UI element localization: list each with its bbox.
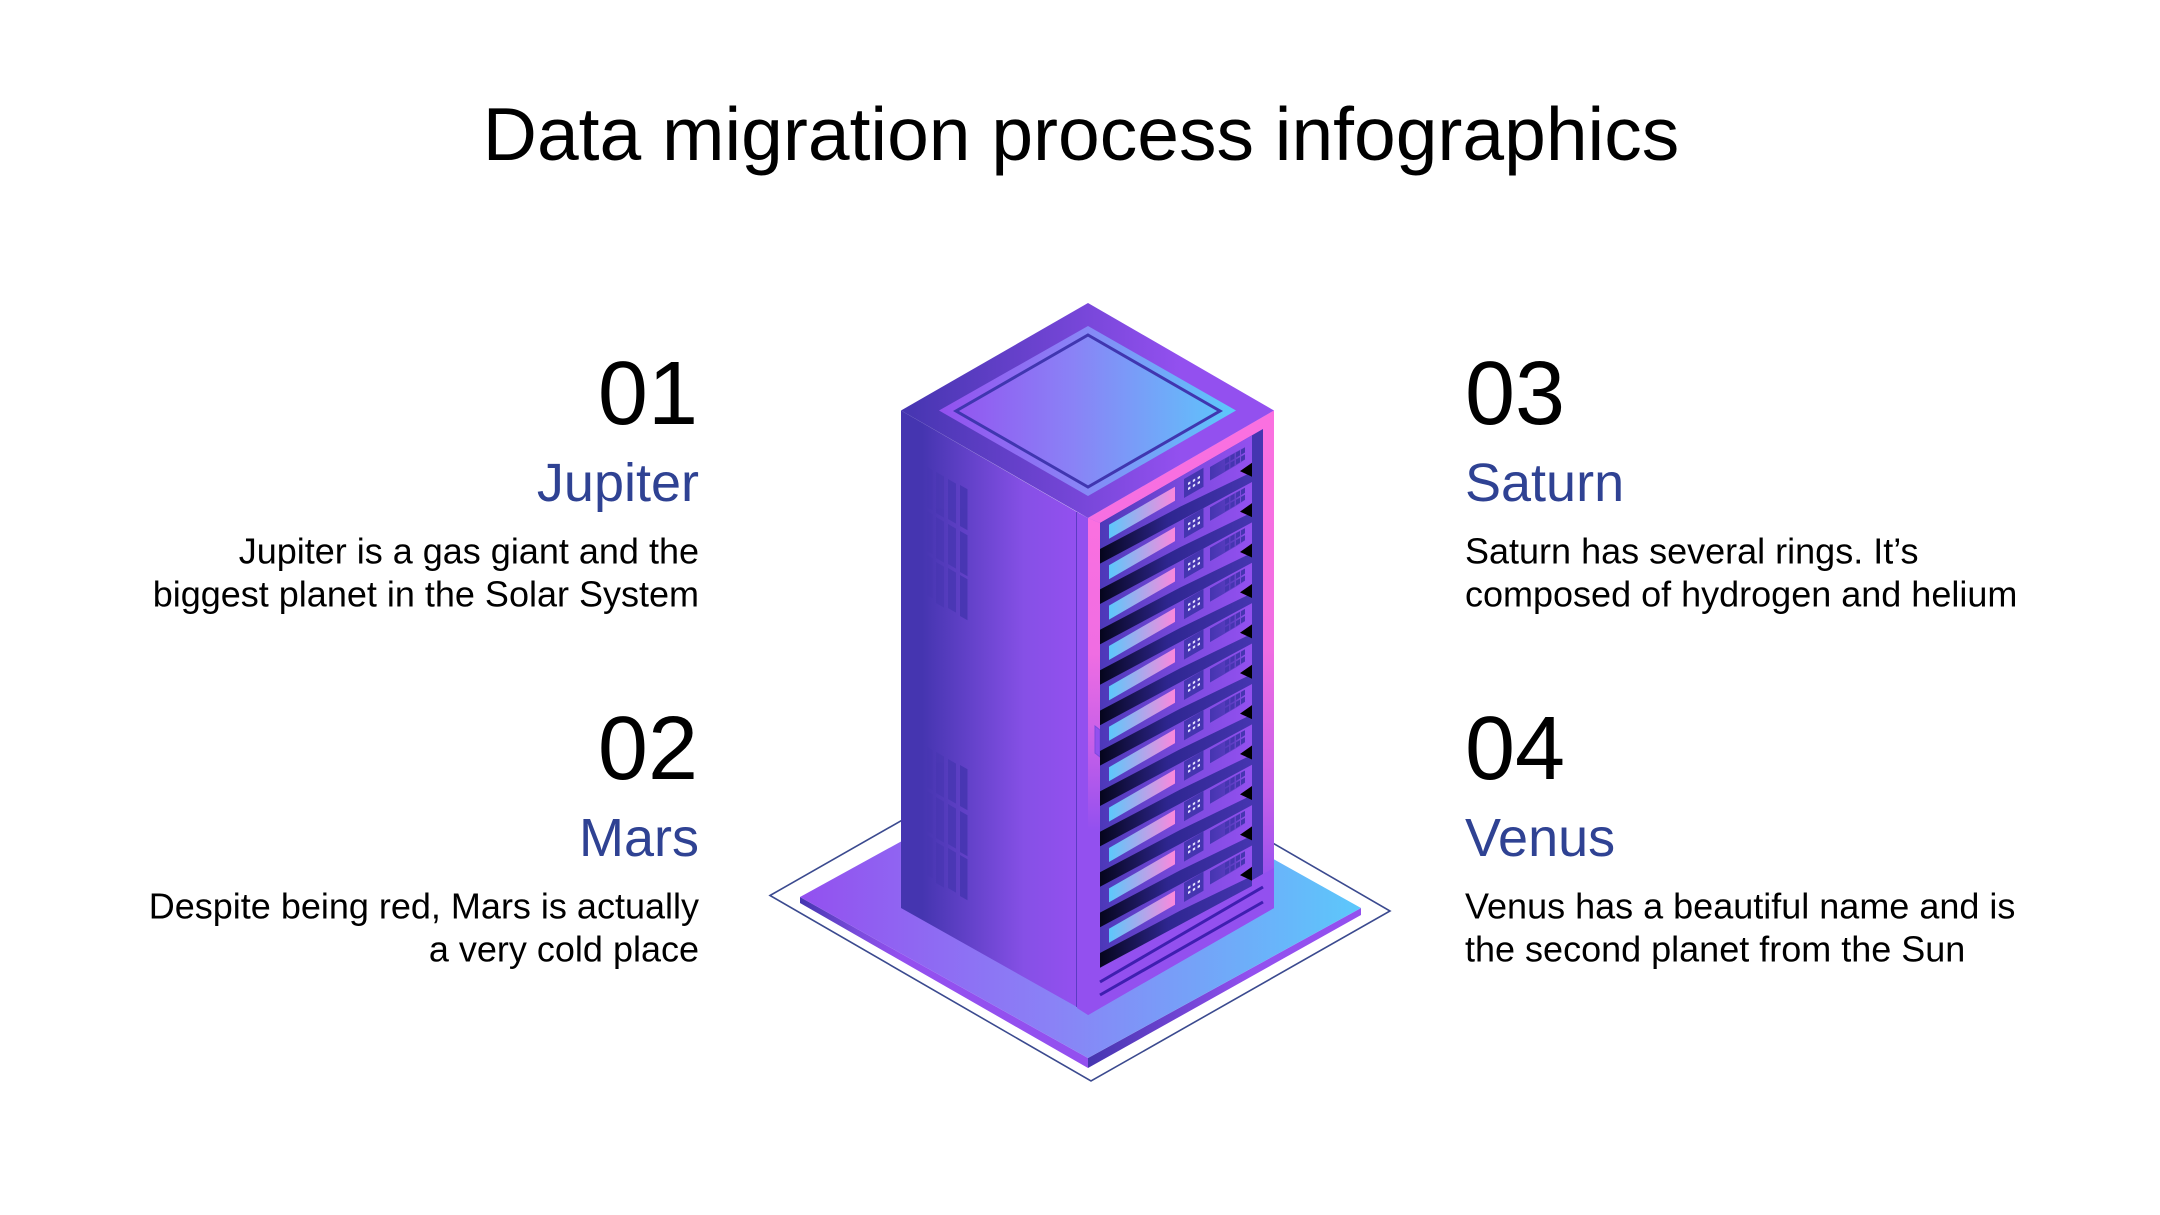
heading: Venus: Venus	[1465, 808, 1615, 868]
rack: left side panel	[901, 410, 1088, 1015]
number 04: 04	[1465, 699, 1565, 799]
panel: 01 Jupiter	[153, 344, 699, 614]
heading: Mars: Mars	[579, 808, 699, 868]
door handle	[1095, 726, 1100, 757]
number 03: 03	[1465, 344, 1565, 444]
number 01: 01	[598, 344, 698, 444]
text: Jupiter description: Jupiter is a gas giant and the	[239, 530, 699, 572]
heading: Saturn: Saturn	[1465, 453, 1624, 513]
illustration: server rack on platform	[770, 303, 1390, 1081]
panel: 02 Mars	[149, 699, 699, 970]
text: Venus description: Venus has a beautiful name and is	[1465, 886, 2015, 926]
text: Mars description: a very cold place	[429, 928, 699, 970]
text: Saturn description: Saturn has several rings. It’s	[1465, 530, 1919, 572]
panel: 03 Saturn	[1465, 344, 2017, 614]
vents	[927, 467, 968, 900]
rack base slots	[1100, 887, 1263, 995]
panel: 04 Venus	[1465, 699, 2015, 970]
text: Jupiter description: biggest planet in the Solar System	[153, 574, 699, 614]
text: Venus description: the second planet from the Sun	[1465, 928, 1965, 970]
title: Data migration process infographics	[483, 92, 1679, 176]
number 02: 02	[598, 699, 698, 799]
text: Mars description: Despite being red, Mars is actually	[149, 886, 699, 926]
rack: top	[901, 303, 1274, 518]
rack: front frame	[1088, 410, 1274, 1015]
server units	[1100, 435, 1252, 974]
platform	[800, 747, 1361, 1068]
text: Saturn description: composed of hydrogen and helium	[1465, 574, 2017, 614]
platform outline	[770, 725, 1390, 1081]
heading: Jupiter: Jupiter	[537, 453, 699, 513]
